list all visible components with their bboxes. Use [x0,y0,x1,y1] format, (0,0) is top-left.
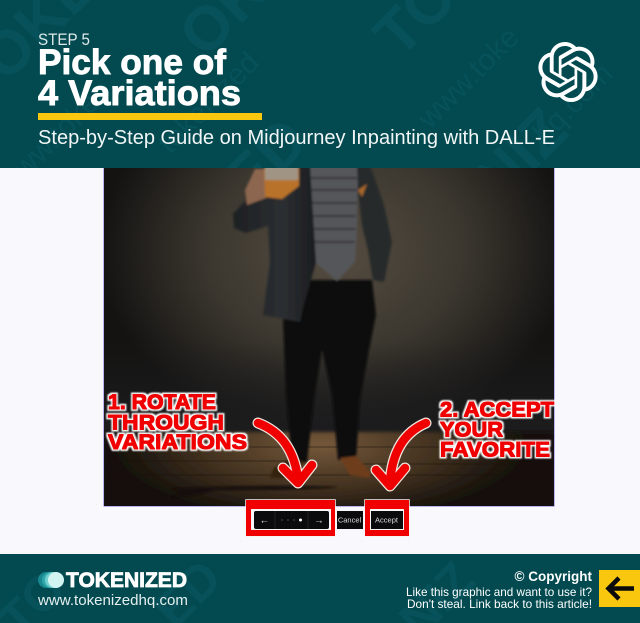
header watermarks: ED [211,105,321,215]
title: Pick one of [38,43,226,82]
highlight box: accept button [365,500,409,536]
jacket left panel and raised arm [233,165,316,322]
rotate toolbar: ← [260,516,270,526]
accept button: Accept [375,516,399,524]
header watermarks: www.toke [411,21,526,136]
callout: rotate through variations: 1. ROTATE [108,390,216,414]
header watermarks: NIZ [461,95,581,215]
floor [104,432,554,508]
highlight box: rotate toolbar [246,500,335,536]
callout: accept your favorite: FAVORITE [440,438,550,462]
trousers [283,280,376,462]
whiskey glass [264,168,299,199]
logo wordmark: TOKENIZED [66,569,187,592]
icon: OpenAI logo [538,42,598,102]
panel: screenshot of generated image [104,165,554,508]
callout: accept your favorite: 2. ACCEPT [440,398,554,422]
arrow: to rotate toolbar [258,423,312,483]
title: 4 Variations [38,74,241,113]
accept button [371,511,403,529]
title [38,43,241,113]
logo: Tokenized [38,569,187,592]
jacket right panel and arm [357,165,392,282]
shoes [270,458,306,478]
step label: STEP 5 [38,30,90,49]
subtitle: Step-by-Step Guide on Midjourney Inpainting with DALL-E [38,127,555,149]
cancel button [337,511,363,529]
title underline [38,113,262,120]
callout: accept your favorite [440,398,554,462]
copyright notice: Don't steal. Link back to this article! [407,597,592,611]
logo mark [38,572,64,588]
header watermarks [0,0,612,168]
copyright notice [406,569,592,611]
toolbar controls [254,511,403,529]
copyright notice: © Copyright [515,569,592,584]
footer band [0,549,640,623]
header watermarks: tokenized [152,46,266,160]
callout: rotate through variations: VARIATIONS [108,430,247,454]
rotate toolbar: → [314,516,324,526]
copyright notice: Like this graphic and want to use it? [406,585,592,599]
rotate toolbar [254,511,329,529]
hand [245,169,266,205]
header band [0,0,640,168]
callout: rotate through variations [108,390,247,454]
callout: accept your favorite: YOUR [440,418,503,442]
icon: yellow back arrow [599,570,640,607]
pocket square [358,184,367,197]
cancel button: Cancel [338,516,362,524]
website url: www.tokenizedhq.com [37,592,188,609]
man in suit [233,165,392,478]
footer watermarks [0,561,476,623]
callout: rotate through variations: THROUGH [108,410,224,434]
header watermarks: hq.com [527,57,620,150]
vest [310,165,358,281]
arrow: to accept button [376,423,426,486]
